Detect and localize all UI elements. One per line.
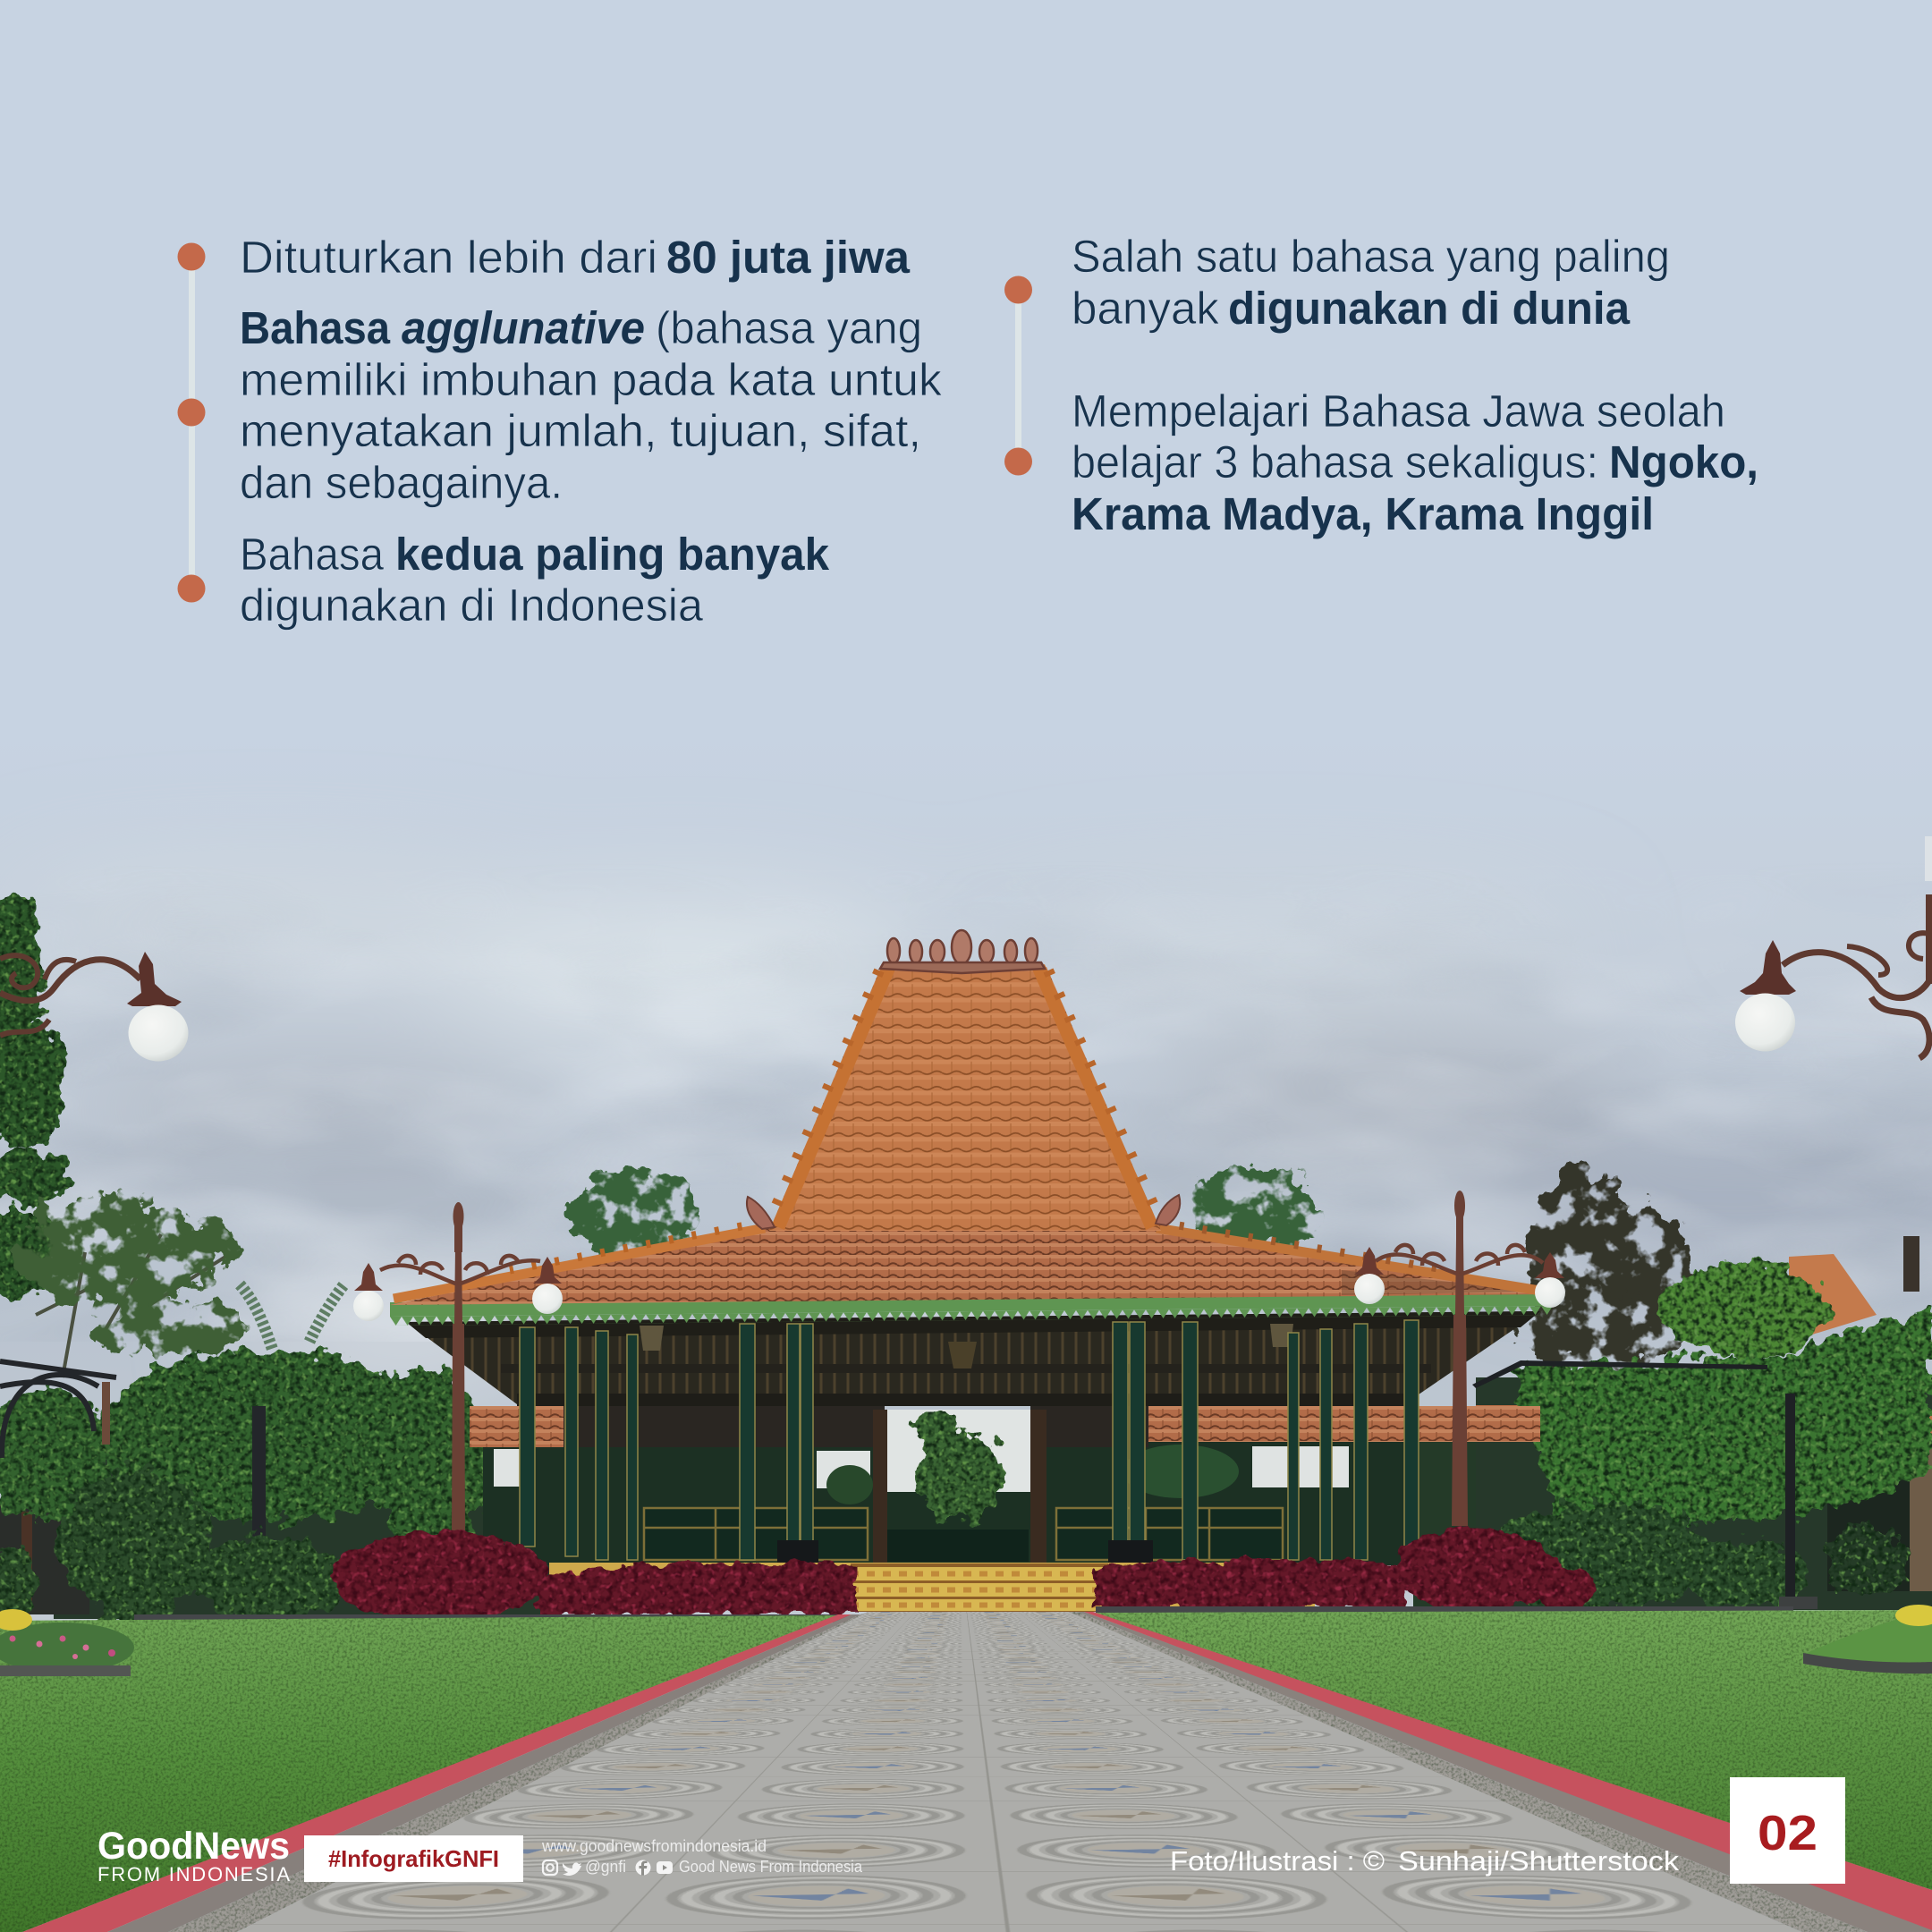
right background house roof, stump and garden base <box>1413 1236 1932 1610</box>
website and social handles: Good News From Indonesia <box>679 1858 863 1876</box>
bullet text: 80 juta jiwa: 80 juta jiwa <box>666 232 911 283</box>
icon: twitter <box>563 1862 581 1876</box>
left garden base, house tiles <box>0 1415 555 1619</box>
lawn left <box>0 1615 838 1932</box>
upper tajug roof <box>768 967 1162 1231</box>
right arbor: black beam and post <box>1472 1360 1818 1609</box>
trees behind the pavilion roof <box>571 1163 1319 1257</box>
rear fence panels <box>644 1508 1283 1562</box>
logo: GoodNews From Indonesia <box>97 1825 290 1885</box>
bullet text: bahasa agglunative: Bahasa <box>240 302 391 353</box>
pavilion base and steps <box>549 1563 1315 1612</box>
timeline right: line and dots <box>1004 275 1032 476</box>
bullet text: digunakan di dunia: banyak <box>1072 283 1219 334</box>
photo credit: Foto/Ilustrasi : © <box>1170 1845 1385 1877</box>
right foreground bushes <box>1485 1503 1904 1610</box>
bullet text: Ngoko, Krama Madya, Krama Inggil <box>1072 386 1758 539</box>
roof crown finials <box>880 930 1045 973</box>
pavilion lamp post right <box>1354 1191 1565 1526</box>
vine arbor at right <box>1512 1306 1932 1521</box>
bullet text: bahasa agglunative: agglunative <box>402 302 645 353</box>
logo: GoodNews From Indonesia: FROM INDONESIA <box>97 1863 290 1885</box>
icon: instagram <box>543 1860 557 1875</box>
lawn right <box>1093 1610 1932 1890</box>
arbor: black arch and post at left <box>0 1361 263 1540</box>
lower roof <box>390 1222 1552 1305</box>
bullet text: Ngoko, Krama Madya, Krama Inggil: belajar 3 bahasa sekaligus: <box>1072 436 1598 487</box>
right broadleaf bush <box>1659 1264 1829 1357</box>
inner back roof band <box>470 1406 1540 1447</box>
bullet text: kedua paling banyak <box>240 529 830 631</box>
tree: sparse olive tree at left <box>13 1197 249 1377</box>
flower bed at left <box>0 1609 134 1676</box>
red coleus hedge left <box>331 1531 857 1621</box>
website and social handles: www.goodnewsfromindonesia.id <box>541 1837 767 1855</box>
bullet text: kedua paling banyak: digunakan di Indonesia <box>240 580 704 631</box>
hashtag badge <box>304 1835 523 1882</box>
website and social handles: @gnfi <box>585 1858 626 1876</box>
bullet text: kedua paling banyak: Bahasa <box>240 529 385 580</box>
tree: tall tree at left edge <box>0 894 73 1297</box>
photo credit <box>1170 1845 1680 1877</box>
bullet text: bahasa agglunative: menyatakan jumlah, tujuan, sifat, <box>240 405 921 456</box>
roof side ornaments <box>747 1195 1180 1229</box>
flower bed at right <box>1803 1605 1932 1674</box>
big ornate lamp at right <box>1735 836 1932 1058</box>
bullet text: digunakan di dunia: Salah satu bahasa yang paling <box>1072 231 1670 282</box>
logo: GoodNews From Indonesia: GoodNews <box>97 1825 290 1868</box>
bullet text: Ngoko, Krama Madya, Krama Inggil: Mempelajari Bahasa Jawa seolah <box>1072 386 1725 436</box>
vine arbor at left <box>0 1351 492 1547</box>
red coleus hedge right <box>1093 1529 1596 1611</box>
bed edging <box>134 1606 1793 1623</box>
right tall dark tree <box>1521 1167 1698 1368</box>
bullet text: 80 juta jiwa: Dituturkan lebih dari <box>240 232 657 283</box>
icon: facebook <box>635 1860 651 1875</box>
pavilion ceiling and rafters <box>406 1311 1540 1406</box>
left foreground bushes <box>0 1467 344 1622</box>
bullet text: bahasa agglunative: (bahasa yang <box>656 302 922 353</box>
page number badge <box>1730 1777 1845 1884</box>
bullet text: digunakan di dunia <box>1072 231 1670 334</box>
hashtag badge: #InfografikGNFI <box>328 1845 499 1872</box>
big ornate lamp at left <box>0 952 188 1061</box>
pavilion lamp post left <box>353 1202 563 1533</box>
bullet text: kedua paling banyak: kedua paling banyak <box>395 529 830 580</box>
green scalloped valance <box>390 1292 1552 1326</box>
bullet text: Ngoko, Krama Madya, Krama Inggil: Krama Madya, Krama Inggil <box>1072 488 1654 539</box>
walkway tiles with concentric ring motifs <box>238 1612 1801 1932</box>
bullet text: Ngoko, Krama Madya, Krama Inggil: Ngoko, <box>1609 436 1758 487</box>
bullet text: digunakan di dunia: digunakan di dunia <box>1228 283 1631 334</box>
walkway border left <box>22 1612 869 1932</box>
bullet text: bahasa agglunative <box>240 302 943 508</box>
pavilion columns <box>520 1320 1419 1563</box>
walkway border right <box>1067 1612 1932 1932</box>
bullet text: bahasa agglunative: dan sebagainya. <box>240 457 563 508</box>
page number badge: 02 <box>1758 1805 1818 1860</box>
palm fronds behind the hedge <box>240 1284 343 1351</box>
bullet text: bahasa agglunative: memiliki imbuhan pada kata untuk <box>240 354 943 405</box>
icon: youtube <box>657 1861 673 1874</box>
photo credit: Sunhaji/Shutterstock <box>1398 1845 1680 1877</box>
website and social handles <box>541 1837 863 1876</box>
pavilion interior view: garden behind the columns <box>483 1409 1413 1565</box>
bullet text: 80 juta jiwa <box>240 232 911 283</box>
timeline left: line and dots <box>177 243 206 603</box>
